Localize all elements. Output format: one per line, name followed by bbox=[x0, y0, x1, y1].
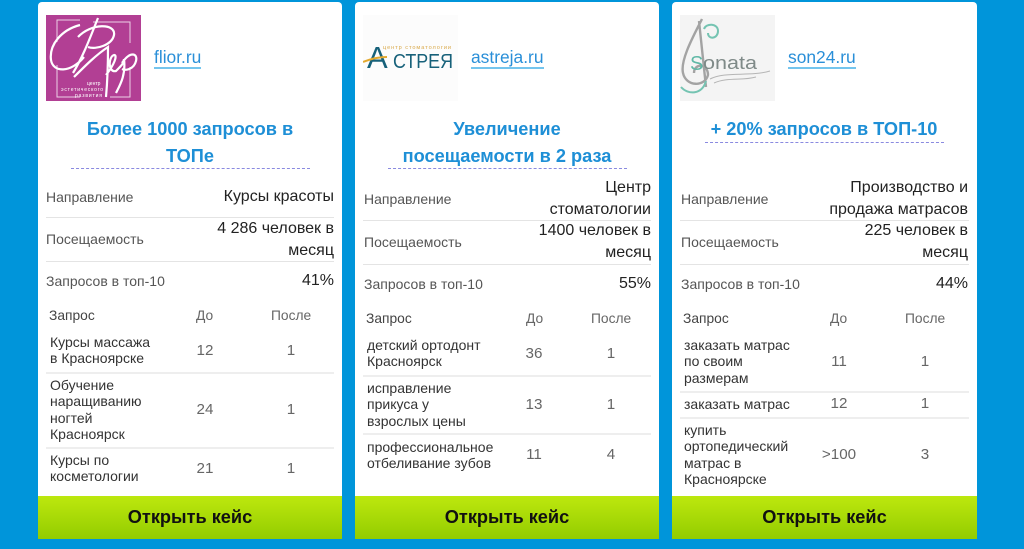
row before: 11 bbox=[526, 446, 542, 463]
row query: Обучение bbox=[50, 377, 114, 393]
table header: before: До bbox=[830, 311, 847, 326]
heading: ТОПе bbox=[166, 146, 214, 166]
table header: before: До bbox=[526, 311, 543, 326]
stat: traffic label: Посещаемость bbox=[681, 234, 779, 250]
row before: 12 bbox=[831, 395, 847, 412]
logo: Флер: эстетического bbox=[61, 87, 103, 93]
logo: Sonata bbox=[680, 15, 775, 101]
row before: 36 bbox=[526, 345, 542, 362]
panel: son24.ru case bbox=[672, 2, 977, 539]
row before: 12 bbox=[197, 342, 213, 359]
row query: в Красноярске bbox=[50, 350, 144, 366]
link: son24.ru bbox=[788, 47, 856, 67]
stat: top-10 label: Запросов в топ-10 bbox=[46, 273, 165, 289]
row after: 1 bbox=[607, 396, 615, 413]
row after: 1 bbox=[287, 342, 295, 359]
stat: direction label: Направление bbox=[364, 191, 451, 207]
stat: top-10 value: 41% bbox=[302, 272, 334, 289]
stat: direction value: Центр bbox=[605, 179, 651, 196]
stat: traffic value: месяц bbox=[605, 244, 651, 260]
row query: размерам bbox=[684, 370, 748, 386]
row query: заказать матрас bbox=[684, 396, 790, 412]
row query: прикуса у bbox=[367, 396, 429, 412]
row after: 1 bbox=[921, 395, 929, 412]
row query: ногтей bbox=[50, 410, 92, 426]
stat: direction value: продажа матрасов bbox=[829, 200, 968, 218]
link: astreja.ru bbox=[471, 47, 544, 67]
button bbox=[355, 496, 659, 539]
row query: профессиональное bbox=[367, 439, 493, 455]
logo: Флер: центр bbox=[87, 81, 101, 87]
stat: top-10 value: 44% bbox=[936, 275, 968, 292]
row query bbox=[367, 439, 493, 471]
table header: after: После bbox=[905, 311, 945, 326]
heading: + 20% запросов в ТОП-10 bbox=[711, 119, 937, 139]
button: Открыть кейс bbox=[445, 507, 569, 527]
row after: 1 bbox=[287, 401, 295, 418]
row query: детский ортодонт bbox=[367, 337, 480, 353]
button bbox=[38, 496, 342, 539]
heading underline bbox=[388, 168, 627, 169]
row query: наращиванию bbox=[50, 393, 142, 409]
panel: flior.ru case bbox=[38, 2, 342, 539]
row before: >100 bbox=[822, 446, 856, 463]
panel: astreja.ru case bbox=[355, 2, 659, 539]
row query bbox=[50, 377, 142, 442]
table header: Запрос bbox=[49, 308, 95, 323]
row after: 1 bbox=[607, 345, 615, 362]
stat: top-10 label: Запросов в топ-10 bbox=[681, 276, 800, 292]
row after: 1 bbox=[287, 460, 295, 477]
table header: Запрос bbox=[683, 311, 729, 326]
button: Открыть кейс bbox=[762, 507, 887, 527]
stat: direction value bbox=[550, 179, 651, 218]
logo: Sonata: onata bbox=[703, 53, 758, 73]
stat: direction label: Направление bbox=[681, 191, 768, 207]
row query: по своим bbox=[684, 353, 743, 369]
row before: 11 bbox=[831, 353, 847, 370]
row query: заказать матрас bbox=[684, 337, 790, 353]
stat: top-10 label: Запросов в топ-10 bbox=[364, 276, 483, 292]
row query: ортопедический bbox=[684, 438, 788, 454]
row query: купить bbox=[684, 422, 726, 438]
table header: before: До bbox=[196, 308, 213, 323]
stat: traffic value: 225 человек в bbox=[865, 222, 968, 239]
heading: Более 1000 запросов в bbox=[87, 119, 293, 139]
stat: direction value: Курсы красоты bbox=[224, 188, 334, 205]
row query: Красноярск bbox=[50, 426, 125, 442]
row query: взрослых цены bbox=[367, 413, 466, 429]
link: flior.ru bbox=[154, 47, 201, 67]
logo: Флер: развития bbox=[75, 93, 102, 99]
stat: traffic value: 1400 человек в bbox=[539, 222, 651, 239]
heading underline bbox=[71, 168, 310, 169]
heading: посещаемости в 2 раза bbox=[403, 146, 611, 166]
row query: отбеливание зубов bbox=[367, 455, 491, 471]
heading bbox=[87, 119, 293, 166]
stat: top-10 value: 55% bbox=[619, 275, 651, 292]
logo: Sonata: S bbox=[690, 53, 703, 75]
stat: direction value: Производство и bbox=[850, 179, 968, 196]
stat: traffic value bbox=[539, 222, 651, 260]
row after: 3 bbox=[921, 446, 929, 463]
row after: 1 bbox=[921, 353, 929, 370]
row query bbox=[367, 380, 466, 429]
stat: direction value: стоматологии bbox=[550, 200, 651, 218]
heading: Увеличение bbox=[453, 119, 561, 139]
row query bbox=[50, 334, 150, 366]
row before: 21 bbox=[197, 460, 213, 477]
row after: 4 bbox=[607, 446, 615, 463]
row query bbox=[50, 452, 139, 484]
row query: Курсы массажа bbox=[50, 334, 150, 350]
row before: 24 bbox=[197, 401, 213, 418]
row query bbox=[684, 422, 788, 487]
stat: traffic value: месяц bbox=[922, 244, 968, 260]
row query: исправление bbox=[367, 380, 451, 396]
stat: traffic value: месяц bbox=[288, 242, 334, 258]
table header: after: После bbox=[591, 311, 631, 326]
row query: косметологии bbox=[50, 468, 139, 484]
logo: Астрея: А bbox=[367, 40, 388, 75]
stat: traffic value bbox=[865, 222, 968, 260]
logo: Астрея bbox=[363, 40, 453, 75]
button bbox=[672, 496, 977, 539]
row query bbox=[367, 337, 480, 369]
heading bbox=[403, 119, 612, 166]
stat: direction label: Направление bbox=[46, 189, 133, 205]
stat: traffic label: Посещаемость bbox=[364, 234, 462, 250]
stat: traffic label: Посещаемость bbox=[46, 231, 144, 247]
button: Открыть кейс bbox=[128, 507, 252, 527]
stat: direction value bbox=[829, 179, 968, 218]
table header: after: После bbox=[271, 308, 311, 323]
row query: Красноярск bbox=[367, 353, 442, 369]
stat: traffic value: 4 286 человек в bbox=[217, 220, 334, 237]
row query: матрас в bbox=[684, 455, 741, 471]
heading underline bbox=[705, 142, 944, 143]
table header: Запрос bbox=[366, 311, 412, 326]
row query: Курсы по bbox=[50, 452, 109, 468]
row query bbox=[684, 337, 790, 386]
stat: traffic value bbox=[217, 220, 334, 258]
logo: Флер bbox=[46, 15, 141, 101]
logo: Астрея: центр стоматологии bbox=[383, 45, 451, 51]
row before: 13 bbox=[526, 396, 542, 413]
row query: Красноярске bbox=[684, 471, 767, 487]
